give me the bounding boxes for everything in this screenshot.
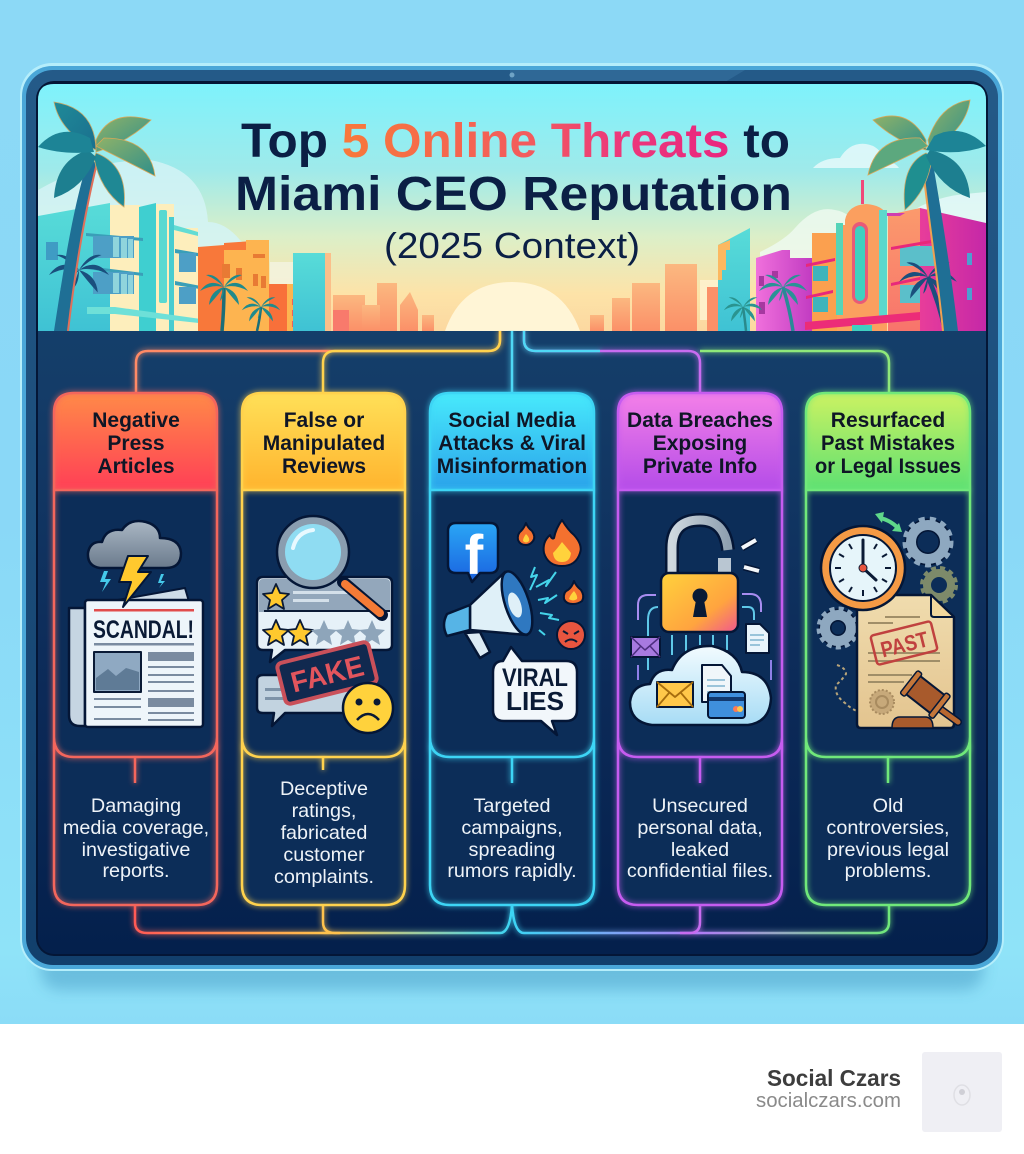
- heading: Negative: [92, 409, 180, 432]
- left big palm: [38, 102, 155, 331]
- description: reports.: [102, 860, 170, 882]
- description: campaigns,: [461, 817, 563, 839]
- title: Miami CEO Reputation: [235, 168, 792, 221]
- right art deco tower: [837, 204, 887, 331]
- card outline: [618, 393, 782, 905]
- card body fills: [54, 490, 217, 905]
- icon: fake reviews under magnifier: FAKE: [288, 650, 367, 699]
- right teal tower: [718, 228, 750, 331]
- icon: newspaper under storm: [69, 521, 203, 727]
- right magenta building: [756, 250, 812, 331]
- heading: Press: [107, 432, 165, 455]
- heading: Manipulated: [263, 432, 385, 455]
- icon: fake reviews under magnifier: [257, 516, 393, 733]
- panel: resurfaced mistakes: [806, 393, 970, 905]
- heading: Private Info: [643, 455, 757, 478]
- panel: social media attacks: [430, 393, 594, 905]
- description: confidential files.: [627, 860, 773, 882]
- panel: negative press: [54, 393, 217, 905]
- tablet frame: [20, 63, 1004, 971]
- heading: Resurfaced: [831, 409, 945, 432]
- description: personal data,: [637, 817, 763, 839]
- description: fabricated: [281, 822, 367, 844]
- card outline: [242, 393, 405, 905]
- footer band: [0, 1024, 1024, 1154]
- description: media coverage,: [63, 817, 209, 839]
- description: previous legal: [827, 839, 949, 861]
- description: leaked: [671, 839, 729, 861]
- heading: Exposing: [653, 432, 747, 455]
- description: complaints.: [274, 866, 374, 888]
- heading: Misinformation: [437, 455, 587, 478]
- heading: Past Mistakes: [821, 432, 955, 455]
- top connectors: [136, 331, 889, 393]
- heading: Social Media: [448, 409, 576, 432]
- card header: [430, 393, 594, 490]
- icon: clock, gears and legal document: [819, 512, 958, 728]
- description: customer: [283, 844, 365, 866]
- heading: Data Breaches: [627, 409, 773, 432]
- description: investigative: [82, 839, 190, 861]
- footer logo tile: [922, 1052, 1002, 1132]
- title: Top 5 Online Threats to: [241, 115, 790, 168]
- heading: False or: [284, 409, 364, 432]
- card outline: [54, 393, 217, 905]
- description: controversies,: [826, 817, 950, 839]
- icon: newspaper under storm: SCANDAL!: [93, 616, 194, 644]
- card header: [54, 393, 217, 490]
- icon: megaphone and viral lies: LIES: [506, 686, 564, 716]
- card header: [806, 393, 970, 490]
- heading: or Legal Issues: [815, 455, 961, 478]
- description: Targeted: [474, 795, 550, 817]
- description: Old: [873, 795, 903, 817]
- card body fills: [806, 490, 970, 905]
- title: [235, 115, 792, 221]
- heading: Attacks & Viral: [438, 432, 586, 455]
- left teal building: [38, 203, 110, 331]
- heading: Reviews: [282, 455, 366, 478]
- right salmon and magenta block: [888, 208, 920, 331]
- description: Damaging: [91, 795, 181, 817]
- icon: megaphone and viral lies: f: [465, 523, 484, 586]
- sun: [445, 282, 580, 331]
- card outline: [430, 393, 594, 905]
- right big palm: [868, 100, 986, 331]
- left orange buildings: [198, 245, 224, 331]
- description: problems.: [845, 860, 931, 882]
- header illustration: Miami skyline: [38, 84, 986, 331]
- panel: data breaches: [618, 393, 782, 905]
- small palms: [49, 255, 957, 331]
- panel: false reviews: [242, 393, 405, 905]
- card header: [618, 393, 782, 490]
- card body fills: [618, 490, 782, 905]
- frame shadow: [40, 930, 984, 990]
- card body fills: [430, 490, 594, 905]
- bottom connectors: [135, 905, 889, 933]
- footer url: socialczars.com: [756, 1090, 901, 1112]
- card header: [242, 393, 405, 490]
- icon: megaphone and viral lies: [444, 520, 585, 735]
- description: rumors rapidly.: [447, 860, 577, 882]
- icon: megaphone and viral lies: VIRAL: [502, 664, 568, 692]
- icon: broken padlock and cloud: [630, 520, 771, 725]
- card outline: [806, 393, 970, 905]
- clouds: [38, 144, 986, 320]
- icon: clock, gears and legal document: PAST: [878, 626, 931, 662]
- heading: Articles: [97, 455, 175, 478]
- subtitle: (2025 Context): [384, 225, 640, 266]
- card body fills: [242, 490, 405, 905]
- description: Deceptive: [280, 778, 368, 800]
- footer brand name: Social Czars: [767, 1065, 901, 1091]
- description: spreading: [469, 839, 555, 861]
- description: Unsecured: [652, 795, 748, 817]
- description: ratings,: [292, 800, 356, 822]
- distant skyline: [333, 283, 660, 331]
